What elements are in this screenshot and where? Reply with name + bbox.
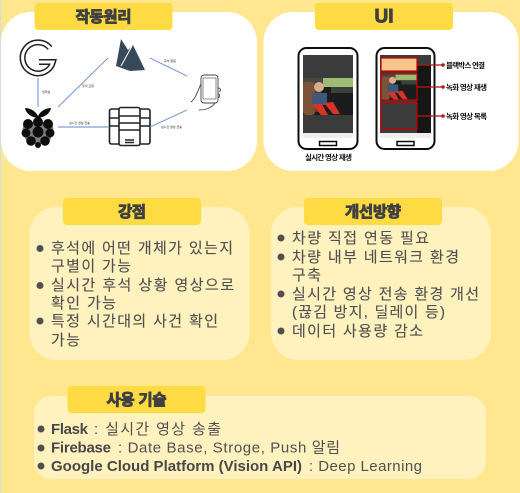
bullet list: 차량 직접 연동 필요 bbox=[292, 230, 429, 247]
bullet list: Firebase bbox=[51, 440, 111, 456]
panel: UI bbox=[264, 3, 518, 171]
bullet list: 특정 시간대의 사건 확인 bbox=[51, 313, 218, 330]
heading: 강점 bbox=[63, 198, 201, 225]
panel: 작동원리 bbox=[1, 3, 257, 171]
bullet list: : Date Base, Stroge, Push 알림 bbox=[118, 440, 340, 456]
callout lines bbox=[417, 64, 444, 117]
bullet list: 구별이 가능 bbox=[51, 258, 131, 275]
heading: UI bbox=[315, 3, 453, 30]
flow labels: 후석 알림 bbox=[164, 58, 176, 63]
icon: Raspberry Pi bbox=[22, 108, 54, 148]
heading: 사용 기술 bbox=[68, 386, 206, 413]
flow labels: 실시간 영상 전송 bbox=[161, 124, 182, 129]
bullet list: Flask bbox=[51, 421, 89, 438]
arrows bbox=[38, 58, 187, 127]
phone: live video bbox=[298, 48, 358, 149]
heading: 강점: 강점 bbox=[118, 203, 146, 221]
bullet list: (끊김 방지, 딜레이 등) bbox=[292, 304, 445, 321]
bullet list: 가능 bbox=[51, 332, 80, 349]
heading: 작동원리 bbox=[34, 3, 172, 30]
heading: 개선방향: 개선방향 bbox=[345, 203, 401, 221]
bullet list: Google Cloud Platform (Vision API) bbox=[51, 458, 302, 475]
bullet list bbox=[36, 240, 234, 349]
heading: UI: UI bbox=[374, 6, 394, 28]
icon: Google bbox=[23, 42, 53, 73]
callout labels bbox=[446, 60, 487, 121]
bullet list: 후석에 어떤 개체가 있는지 bbox=[51, 240, 233, 257]
panel: 강점 bbox=[30, 198, 250, 360]
bullet list: 확인 가능 bbox=[51, 295, 116, 312]
callout labels: 녹화 영상 목록 bbox=[446, 111, 487, 121]
phone: recording screen bbox=[376, 48, 434, 149]
panel: 사용 기술 bbox=[34, 386, 486, 479]
flow labels: 후석 요청 bbox=[82, 83, 94, 88]
bullet list: 구축 bbox=[292, 267, 321, 284]
bullet list: 실시간 후석 상황 영상으로 bbox=[51, 277, 234, 294]
bullet list: 실시간 영상 전송 환경 개선 bbox=[292, 286, 479, 303]
icon: phone in hand bbox=[191, 75, 220, 110]
diagram: system flow bbox=[22, 39, 220, 148]
heading: 사용 기술: 사용 기술 bbox=[106, 391, 166, 409]
bullet list bbox=[278, 230, 479, 340]
flow labels: 입력실 bbox=[42, 89, 51, 94]
callout labels: 블랙박스 연결 bbox=[446, 60, 485, 70]
heading: 작동원리: 작동원리 bbox=[76, 8, 132, 26]
panel: 개선방향 bbox=[271, 198, 491, 360]
bullet list bbox=[38, 421, 422, 475]
bullet list: 차량 내부 네트워크 환경 bbox=[292, 249, 459, 266]
bullet list: : Deep Learning bbox=[309, 458, 422, 475]
heading: 개선방향 bbox=[304, 198, 442, 225]
bullet list: 데이터 사용량 감소 bbox=[292, 323, 423, 340]
flow labels: 실시간 영상 전송 bbox=[69, 120, 90, 125]
icon: Firebase bbox=[116, 39, 145, 71]
icon: servers bbox=[110, 108, 150, 146]
callout labels: 녹화 영상 재생 bbox=[446, 82, 487, 92]
bullet list: : 실시간 영상 송출 bbox=[94, 421, 221, 438]
caption: 실시간 영상 재생 bbox=[305, 152, 352, 162]
flow labels bbox=[42, 58, 182, 129]
